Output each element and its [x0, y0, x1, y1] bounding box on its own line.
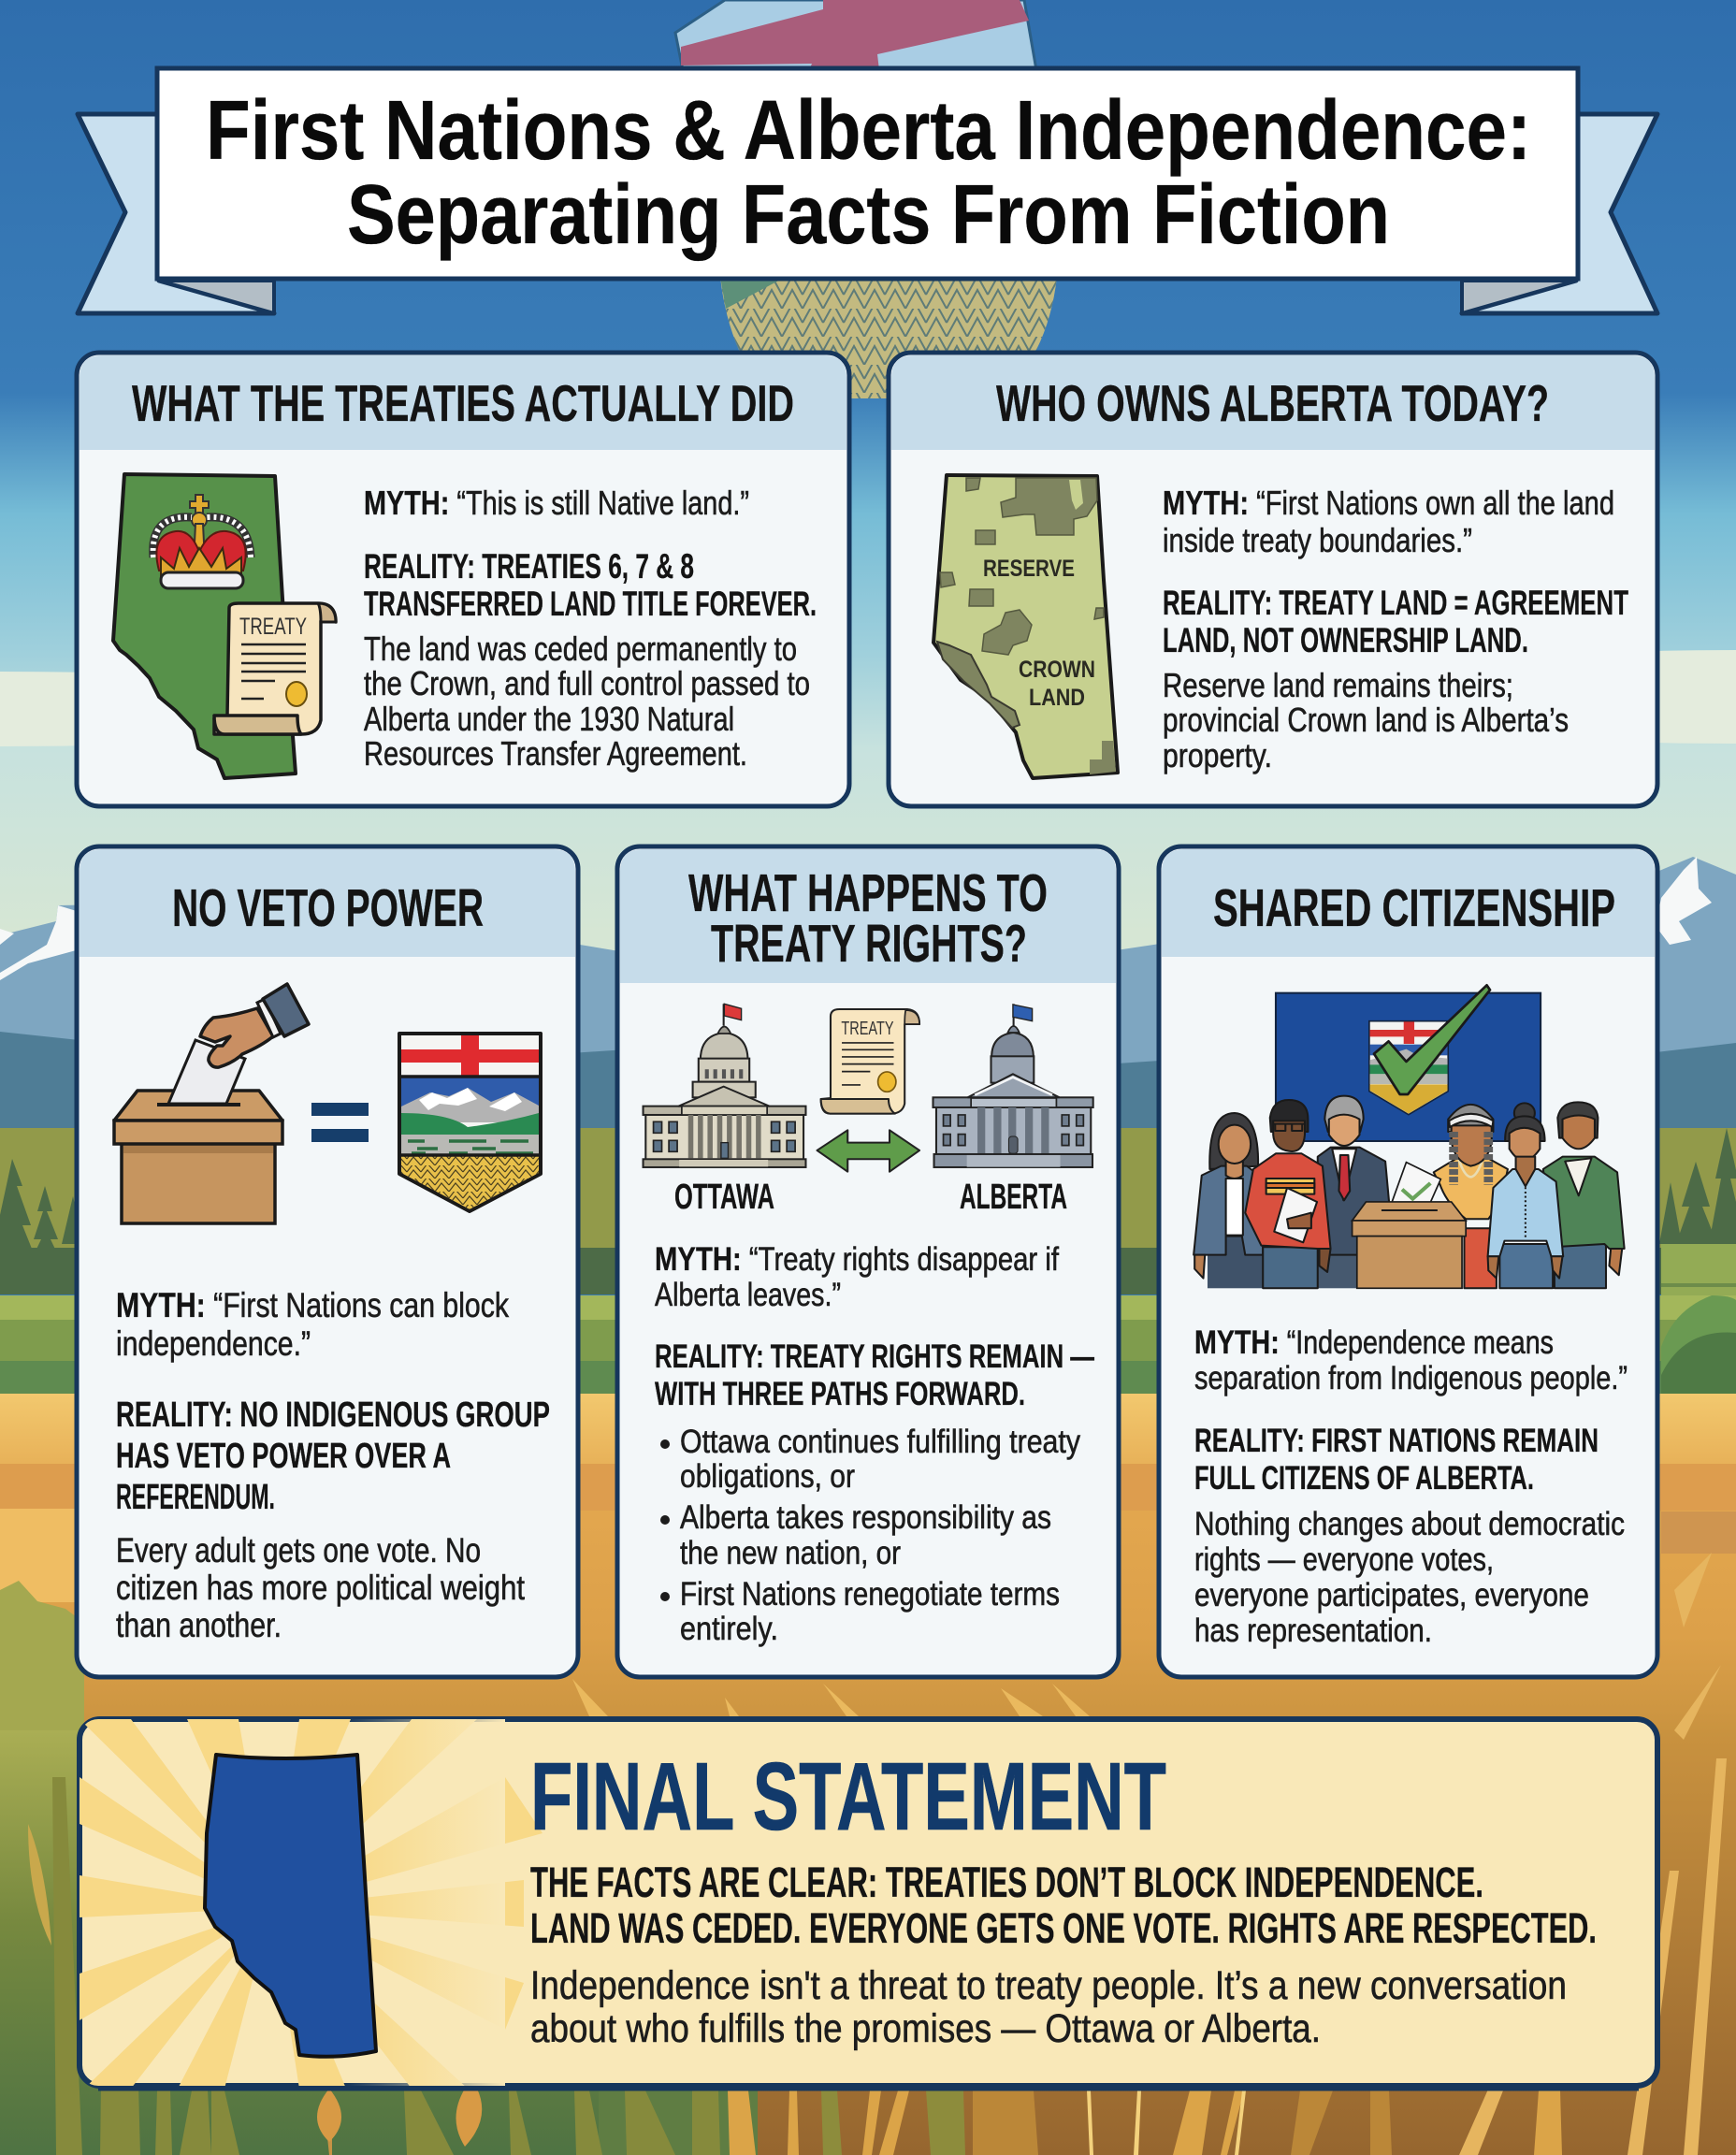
text: summary: Independence isn't a threat to treaty people. It’s a new conversation: [530, 1963, 1567, 2008]
text: myth and reality: [1194, 1324, 1628, 1649]
icon: land map: CROWN: [1019, 657, 1095, 683]
list: three paths: Alberta takes responsibility as: [680, 1499, 1051, 1536]
text: summary: about who fulfills the promises — Ottawa or Alberta.: [530, 2006, 1321, 2051]
text: myth and reality: citizen has more political weight: [116, 1569, 526, 1607]
figure: woman in blue shirt: [1488, 1103, 1563, 1288]
icon: treaty scroll: TREATY: [841, 1019, 894, 1039]
text: myth and reality: [1163, 484, 1628, 774]
text: myth and reality: [364, 484, 817, 773]
text: myth and reality: has representation.: [1194, 1613, 1432, 1649]
icon: Alberta flag: [1276, 985, 1541, 1141]
text: myth and reality: FULL CITIZENS OF ALBERTA.: [1194, 1460, 1534, 1497]
text: summary: [530, 1859, 1597, 2051]
icon: crown: [153, 495, 251, 588]
text: myth and reality: REALITY: TREATIES 6, 7 & 8: [364, 547, 694, 586]
title text: Separating Facts From Fiction: [347, 168, 1390, 262]
text: myth and reality: REALITY: TREATY RIGHTS REMAIN —: [655, 1338, 1094, 1375]
text: myth and reality: MYTH: “First Nations own all the land: [1163, 484, 1614, 522]
text: myth and reality: rights — everyone votes,: [1194, 1541, 1494, 1578]
icon: treaty scroll: [214, 603, 336, 734]
icon: treaty scroll: TREATY: [239, 614, 307, 640]
panel: shared citizenship: [1159, 846, 1657, 1677]
right ribbon tail: [1462, 114, 1657, 313]
icon: land map: LAND: [1029, 685, 1085, 711]
title text: First Nations & Alberta Independence:: [206, 84, 1531, 178]
text: myth and reality: REFERENDUM.: [116, 1478, 275, 1517]
text: myth and reality: Resources Transfer Agreement.: [364, 734, 747, 773]
figure: man in green sweater: [1543, 1102, 1625, 1288]
text: myth and reality: WITH THREE PATHS FORWARD.: [655, 1376, 1025, 1412]
grass blades: [52, 1777, 720, 2155]
heading: WHAT THE TREATIES ACTUALLY DID: [132, 374, 794, 432]
panel: what happens to treaty rights: [617, 846, 1119, 1677]
icon: ballot box: [114, 984, 309, 1223]
heading: NO VETO POWER: [172, 878, 484, 938]
text: myth and reality: MYTH: “First Nations can block: [116, 1286, 509, 1324]
text: myth and reality: HAS VETO POWER OVER A: [116, 1437, 451, 1476]
text: myth and reality: separation from Indigenous people.”: [1194, 1360, 1628, 1396]
arrow: two-way: [817, 1130, 919, 1172]
icon: Alberta map with crown and treaty: [113, 474, 336, 778]
trees: [0, 1128, 1736, 1263]
text: myth and reality: REALITY: NO INDIGENOUS GROUP: [116, 1396, 550, 1435]
text: myth and reality: independence.”: [116, 1324, 311, 1363]
text: myth and reality: Every adult gets one vote. No: [116, 1531, 481, 1569]
figure: man in suit: [1318, 1096, 1389, 1288]
text: myth and reality: than another.: [116, 1606, 282, 1644]
list: three paths: entirely.: [680, 1611, 778, 1647]
heading: [688, 863, 1048, 974]
list: three paths: the new nation, or: [680, 1535, 901, 1571]
text: myth and reality: MYTH: “This is still Native land.”: [364, 484, 749, 522]
panel: no veto power: [77, 846, 578, 1677]
text: myth and reality: Alberta leaves.”: [655, 1277, 841, 1313]
heading: TREATY RIGHTS?: [711, 914, 1027, 974]
text: myth and reality: Nothing changes about democratic: [1194, 1506, 1625, 1542]
list: three paths: Ottawa continues fulfilling treaty: [680, 1424, 1080, 1460]
figure: woman in blazer: [1194, 1113, 1263, 1288]
title text: [206, 84, 1531, 262]
heading: WHAT HAPPENS TO: [688, 863, 1048, 923]
list: three paths: [660, 1424, 1080, 1647]
list: three paths: obligations, or: [680, 1458, 855, 1495]
title banner: [78, 68, 1657, 313]
icon: land map: [933, 475, 1118, 778]
text: myth and reality: [655, 1241, 1094, 1412]
icon: treaty scroll: [821, 1009, 919, 1114]
heading: FINAL STATEMENT: [530, 1743, 1166, 1850]
label: Alberta: ALBERTA: [960, 1178, 1067, 1217]
text: myth and reality: provincial Crown land is Alberta’s: [1163, 701, 1569, 739]
figure: elder with braids: [1434, 1105, 1508, 1288]
text: myth and reality: The land was ceded permanently to: [364, 629, 797, 668]
text: myth and reality: TRANSFERRED LAND TITLE FOREVER.: [364, 585, 817, 623]
text: myth and reality: Alberta under the 1930 Natural: [364, 700, 734, 738]
icon: Alberta map: [205, 1755, 376, 2057]
text: myth and reality: REALITY: FIRST NATIONS REMAIN: [1194, 1423, 1599, 1459]
left ribbon tail: [78, 114, 274, 313]
text: myth and reality: [116, 1286, 550, 1644]
label: Ottawa: OTTAWA: [674, 1178, 774, 1217]
icon: Ottawa building: [644, 1004, 805, 1167]
panel: final statement: [80, 1719, 1657, 2089]
panel: who owns Alberta today: [889, 353, 1657, 806]
list: three paths: First Nations renegotiate terms: [680, 1576, 1060, 1613]
text: myth and reality: MYTH: “Independence means: [1194, 1324, 1554, 1361]
text: myth and reality: the Crown, and full control passed to: [364, 664, 810, 702]
text: myth and reality: inside treaty boundaries.”: [1163, 521, 1472, 559]
icon: ballot box with check: [1353, 1163, 1466, 1288]
text: myth and reality: MYTH: “Treaty rights disappear if: [655, 1241, 1059, 1278]
icon: Alberta building: [933, 1004, 1093, 1167]
text: myth and reality: Reserve land remains theirs;: [1163, 666, 1513, 704]
icon: Alberta shield: [399, 1034, 541, 1211]
icon: equals sign: [311, 1103, 369, 1142]
figure: man in red sweater: [1245, 1100, 1331, 1288]
panel: what the treaties actually did: [77, 353, 849, 806]
text: myth and reality: property.: [1163, 736, 1272, 774]
text: myth and reality: everyone participates, everyone: [1194, 1577, 1589, 1613]
sunburst rays: [80, 1719, 542, 2089]
text: myth and reality: LAND, NOT OWNERSHIP LAND.: [1163, 621, 1528, 659]
faded Alberta shield behind title: [675, 0, 1057, 398]
icon: land map: RESERVE: [983, 556, 1075, 582]
illustration: citizens and flag: [1194, 985, 1625, 1288]
